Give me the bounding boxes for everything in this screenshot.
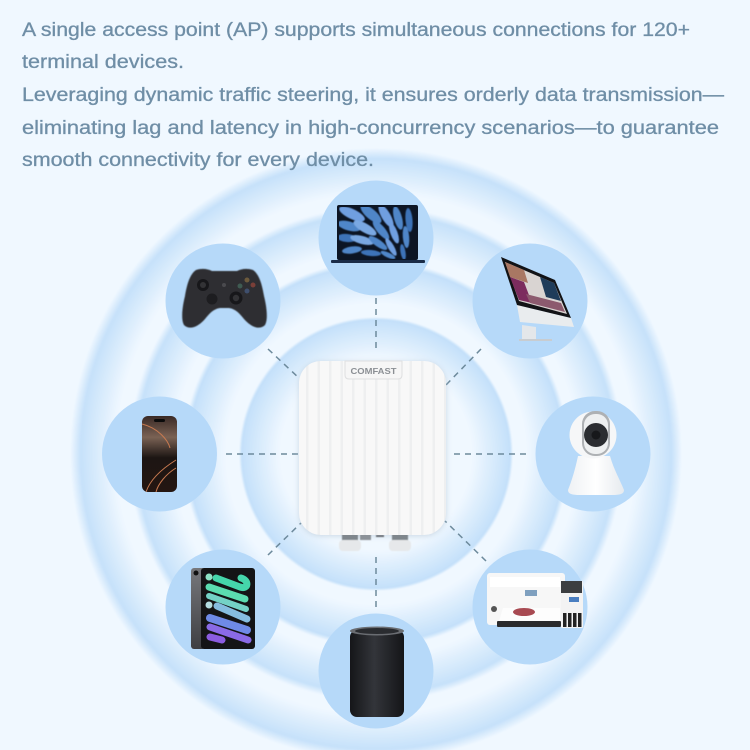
cable glands bbox=[339, 533, 411, 551]
concentric signal rings bbox=[70, 148, 682, 750]
dashed connectors bbox=[226, 298, 527, 612]
description text: smooth connectivity for every device. bbox=[22, 150, 374, 171]
description text: eliminating lag and latency in high-concurrency scenarios—to guarantee bbox=[22, 118, 719, 139]
description text: terminal devices. bbox=[22, 52, 184, 73]
brand plate: COMFAST bbox=[350, 366, 397, 376]
description text bbox=[22, 20, 724, 171]
device: printer bbox=[472, 550, 588, 664]
enclosure bbox=[299, 361, 446, 535]
device: security camera bbox=[536, 396, 650, 512]
device: smart speaker bbox=[318, 614, 434, 728]
description text: A single access point (AP) supports simultaneous connections for 120+ bbox=[22, 20, 690, 41]
enclosure shadow bbox=[299, 362, 446, 536]
description text: Leveraging dynamic traffic steering, it ensures orderly data transmission— bbox=[22, 85, 724, 106]
brand plate bbox=[345, 361, 402, 379]
access point device bbox=[299, 361, 446, 551]
device: game controller bbox=[166, 244, 280, 358]
device: smartphone bbox=[102, 396, 217, 512]
device: laptop bbox=[318, 180, 434, 296]
device: tablet bbox=[166, 550, 280, 664]
device: desktop monitor bbox=[472, 244, 588, 358]
